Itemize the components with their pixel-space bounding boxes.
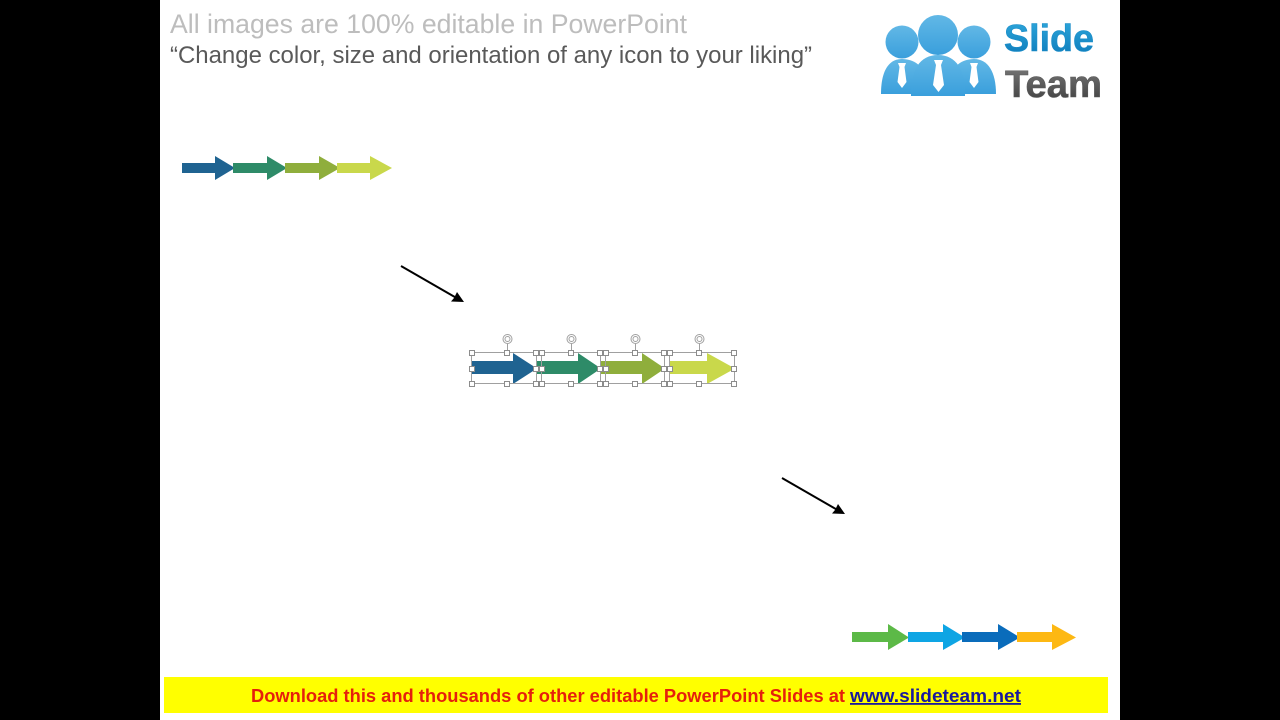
logo word: Team: Team	[1005, 64, 1102, 106]
banner link: www.slideteam.net	[849, 686, 1021, 706]
centre selected arrow chain	[470, 334, 736, 386]
selection handles	[470, 350, 736, 386]
arrow: sky blue	[908, 624, 965, 650]
arrow: amber	[1017, 624, 1076, 650]
title	[170, 9, 812, 69]
arrow: lime	[337, 156, 392, 180]
arrow: olive green	[285, 156, 340, 180]
logo word: Slide: Slide	[1004, 18, 1094, 60]
arrow: lime	[669, 353, 735, 384]
arrow: olive green	[600, 353, 665, 384]
black arrow: upper	[401, 266, 464, 302]
heading: editable images: All images are 100% editable in PowerPoint	[170, 9, 688, 39]
banner background	[164, 677, 1108, 713]
icon: left person	[881, 26, 925, 94]
icon: centre person	[911, 15, 965, 96]
bottom-right arrow chain	[852, 624, 1076, 650]
download banner	[164, 677, 1108, 713]
arrow: teal green	[536, 353, 601, 384]
slide background	[160, 0, 1120, 720]
selection frames	[472, 334, 734, 384]
arrow: dark blue	[182, 156, 235, 180]
logo: Slide Team	[881, 15, 1102, 106]
arrow: royal blue	[962, 624, 1020, 650]
subheading: change color: “Change color, size and orientation of any icon to your liking”	[170, 42, 812, 69]
arrow: dark blue	[471, 353, 537, 384]
top-left arrow chain	[182, 156, 392, 180]
arrow: teal green	[233, 156, 287, 180]
black arrow: lower	[782, 478, 845, 514]
banner text: Download this and thousands of other editable PowerPoint Slides at	[251, 686, 845, 706]
arrow: green	[852, 624, 909, 650]
icon: right person	[951, 26, 996, 94]
